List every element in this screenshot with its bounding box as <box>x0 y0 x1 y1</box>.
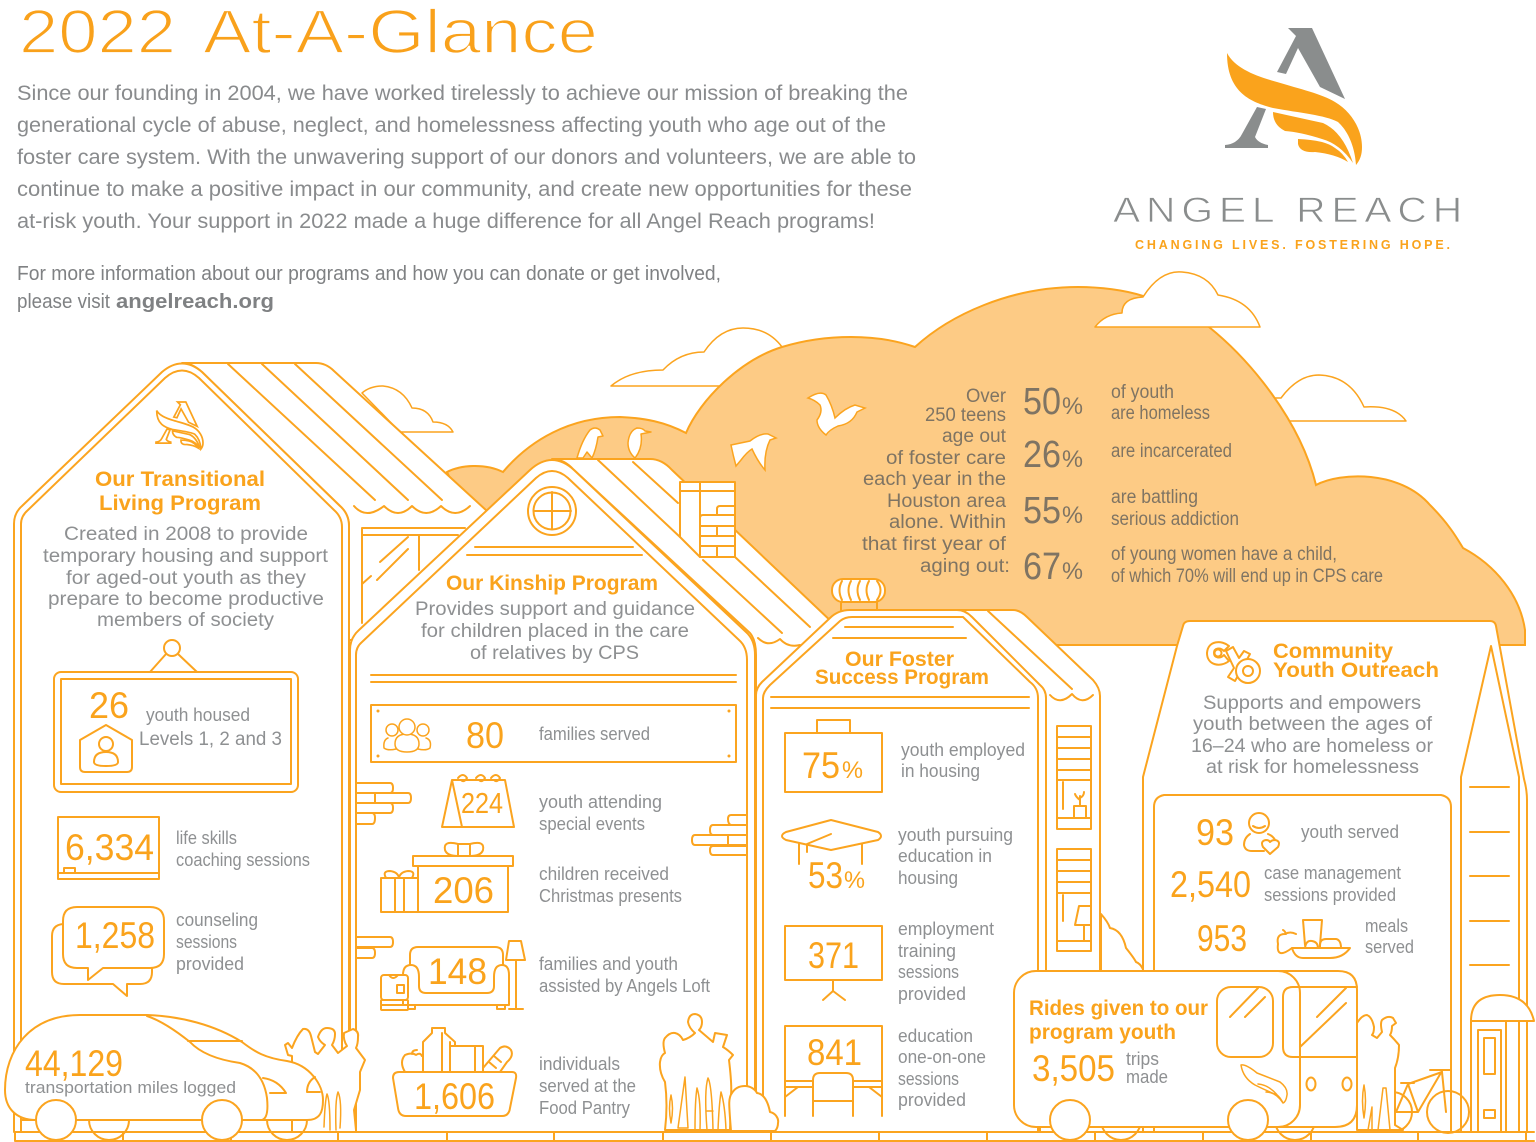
stat: Angels Loft: assisted by Angels Loft <box>539 976 710 996</box>
icon: bus wing <box>1241 1065 1287 1103</box>
stat: 26 percent <box>1023 434 1232 476</box>
description: Outreach <box>1191 693 1434 778</box>
panel: Kinship Program house <box>350 428 835 1132</box>
stat: youth employed: in housing <box>901 761 980 781</box>
bird on roof left <box>577 428 603 458</box>
house 4 walls <box>1143 621 1527 1132</box>
icon: desk calendar <box>442 775 514 827</box>
icon: gift boxes <box>381 843 513 912</box>
aging out text: age out <box>942 426 1007 447</box>
stat: 50 percent: are homeless <box>1111 403 1210 424</box>
description: Transitional Living: prepare to become productive <box>48 589 324 610</box>
sign: youth housed: 26 <box>89 685 129 726</box>
foster front walls <box>756 610 1046 1132</box>
stat: youth pursuing education <box>782 820 1013 896</box>
stat: counseling sessions <box>52 907 258 996</box>
heading: Our Foster Success Program <box>815 648 989 689</box>
stat: miles logged: transportation miles logged <box>25 1078 236 1097</box>
bird: flying dove large <box>808 393 865 435</box>
silhouette: family <box>660 1014 733 1130</box>
heading: Our Transitional Living Program: Living Program <box>99 492 261 515</box>
panel: Transitional Living Program house <box>14 364 349 1132</box>
sign: youth housed <box>54 640 298 792</box>
stat: 26 percent: are incarcerated <box>1111 441 1232 462</box>
stat: education sessions: education <box>898 1026 973 1046</box>
roof lines <box>598 460 810 633</box>
stat: trips made: 3,505 <box>1032 1048 1115 1089</box>
sign: youth housed: Levels 1, 2 and 3 <box>139 729 282 750</box>
car body <box>5 1015 323 1120</box>
icon: bicycle <box>1372 1070 1469 1133</box>
stat: Food Pantry: served at the <box>539 1076 636 1096</box>
heading: rides given <box>1029 997 1208 1044</box>
stat: 26 percent: % <box>1062 446 1083 473</box>
car door line <box>147 1016 320 1120</box>
stat: case management <box>1170 863 1401 905</box>
cloud: right <box>1270 375 1406 421</box>
stat: youth served: 93 <box>1196 812 1234 853</box>
stat: youth employed <box>785 720 1025 792</box>
icon: grocery basket <box>393 1028 516 1116</box>
stat: Food Pantry: individuals <box>539 1054 620 1074</box>
aging out text: Over <box>966 386 1007 407</box>
icon: briefcase <box>785 720 882 792</box>
stat: 67 percent: of which 70% will end up in CPS care <box>1111 566 1383 587</box>
bird: flying dove small <box>731 434 776 470</box>
icon: sofa, lamp and clothes <box>381 941 525 1010</box>
description: Kinship: for children placed in the care <box>421 621 689 642</box>
car front wheels <box>36 1100 242 1140</box>
bus side window <box>1217 987 1273 1057</box>
stat: youth pursuing education: % <box>844 867 865 894</box>
stat: employment training: sessions <box>898 962 959 982</box>
stat: meals served: meals <box>1365 916 1408 936</box>
plaque: families served: 80 <box>466 715 504 756</box>
stat: education sessions: sessions <box>898 1069 959 1089</box>
bus body <box>1014 971 1300 1127</box>
description: Outreach: 16–24 who are homeless or <box>1191 736 1434 757</box>
roof trim <box>833 627 966 638</box>
description: Outreach: youth between the ages of <box>1193 714 1433 735</box>
icon: angel reach outline mark <box>156 402 203 449</box>
bus front section <box>1280 971 1357 1127</box>
stat: youth pursuing education: education in <box>898 846 992 866</box>
stat: Christmas presents <box>381 843 682 912</box>
stat: meals served: 953 <box>1197 918 1247 959</box>
bus: rides given <box>1014 971 1357 1140</box>
description: Kinship: Provides support and guidance <box>415 599 695 620</box>
stat: special events: youth attending <box>539 792 662 812</box>
heading: Community Youth Outreach: Youth Outreach <box>1273 659 1439 682</box>
description: Transitional Living <box>43 524 329 631</box>
heading: Our Transitional Living Program <box>95 468 265 515</box>
stat: miles logged <box>25 1043 236 1097</box>
heading: Our Transitional Living Program: Our Transitional <box>95 468 265 491</box>
bricks: left upper <box>357 783 411 824</box>
foster side roof and wall <box>900 610 1100 975</box>
stat: counseling sessions: 1,258 <box>75 915 155 956</box>
heading: Our Kinship Program: Our Kinship Program <box>446 572 658 595</box>
title: 2022 <box>19 0 176 67</box>
intro paragraph <box>17 82 916 233</box>
shrub by foster house <box>729 1086 778 1131</box>
intro paragraph: Since our founding in 2004, we have worked tirelessly to achieve our mission of breaking the <box>17 82 908 105</box>
stat: 67 percent: of young women have a child, <box>1111 544 1337 565</box>
house 1 roof and side wall <box>182 363 487 640</box>
car rear wheels <box>89 1120 307 1140</box>
icon: graduation cap <box>782 820 881 864</box>
stat: 26 percent: 26 <box>1023 434 1061 476</box>
description: Transitional Living: for aged-out youth as they <box>66 568 307 589</box>
stat: special events: special events <box>539 814 645 834</box>
stat: education sessions: 841 <box>807 1032 862 1073</box>
stat: youth served <box>1196 812 1399 854</box>
description: Outreach: at risk for homelessness <box>1206 757 1419 778</box>
silhouette: people by car <box>285 1028 365 1132</box>
inner panel <box>1154 795 1451 1132</box>
trim lines <box>771 697 1029 708</box>
aging out text: aging out: <box>920 556 1010 577</box>
stat: life skills coaching: life skills <box>176 828 237 848</box>
cloud: top <box>1095 272 1260 327</box>
heading: Community Youth Outreach <box>1273 640 1439 682</box>
stat: youth employed: % <box>842 757 863 784</box>
stat: employment training: training <box>898 941 956 961</box>
stat: counseling sessions: provided <box>176 954 244 974</box>
stat: meals served: served <box>1365 937 1414 957</box>
stat: special events: 224 <box>461 788 503 820</box>
aging out text: Houston area <box>887 491 1006 512</box>
roof trim lines <box>467 547 642 555</box>
description: Transitional Living: temporary housing and support <box>43 546 329 567</box>
description: Kinship: of relatives by CPS <box>470 643 639 664</box>
stat: life skills coaching <box>58 817 310 879</box>
stats block: youth aging out <box>862 381 1383 588</box>
stat: miles logged: 44,129 <box>25 1043 123 1084</box>
stat: 67 percent: 67 <box>1023 546 1061 588</box>
heading: rides given: Rides given to our <box>1029 997 1208 1020</box>
shrub behind <box>1101 914 1145 975</box>
more information text: angelreach.org <box>116 291 274 313</box>
windows: side of house <box>1057 726 1091 951</box>
stat: employment training <box>785 919 994 1004</box>
bus wheels <box>1050 1100 1268 1140</box>
description: Transitional Living: members of society <box>97 610 275 631</box>
silhouette: person at bus <box>1357 1015 1403 1130</box>
stat: 55 percent <box>1023 487 1239 532</box>
aging out text: alone. Within <box>889 512 1006 533</box>
logo tagline: CHANGING LIVES. FOSTERING HOPE. <box>1135 238 1450 252</box>
stat: youth pursuing education: housing <box>898 868 958 888</box>
stat: youth served: youth served <box>1301 822 1399 842</box>
description: Transitional Living: Created in 2008 to provide <box>64 524 308 545</box>
stat: special events <box>442 775 662 834</box>
stat: youth pursuing education: 53 <box>808 855 843 896</box>
stat: case management: sessions provided <box>1264 885 1396 905</box>
icon: chalkboard <box>58 817 159 879</box>
stat: case management: 2,540 <box>1170 864 1251 905</box>
aging out text <box>862 386 1010 577</box>
heading: Our Foster Success Program: Success Program <box>815 666 989 689</box>
chimney <box>680 482 735 557</box>
house 2 walls <box>350 460 755 1132</box>
logo mark <box>1225 28 1362 165</box>
bird on roof right <box>628 428 651 458</box>
bricks: right <box>692 815 747 855</box>
icon: group of people <box>384 719 430 752</box>
stat: Christmas presents: 206 <box>433 870 494 911</box>
background cloud <box>447 287 1525 645</box>
heading: rides given: program youth <box>1029 1021 1176 1044</box>
aging out text: 250 teens <box>925 405 1006 426</box>
stat: youth employed: youth employed <box>901 740 1025 760</box>
stat: 67 percent: % <box>1062 558 1083 585</box>
aging out text: of foster care <box>886 448 1006 469</box>
stat: employment training: 371 <box>808 935 859 976</box>
cloud: left <box>611 328 782 386</box>
stat: youth employed: 75 <box>802 745 840 786</box>
icon: meal plate <box>1278 920 1350 958</box>
stat: employment training: provided <box>898 984 966 1004</box>
stat: 55 percent: 55 <box>1023 490 1061 532</box>
title <box>19 0 598 67</box>
stat: trips made <box>1032 1048 1168 1089</box>
sign: youth housed: youth housed <box>146 705 250 725</box>
plaque: families served: families served <box>539 724 650 744</box>
stat: counseling sessions: sessions <box>176 932 237 952</box>
stat: 50 percent: 50 <box>1023 381 1061 423</box>
stat: counseling sessions: counseling <box>176 910 258 930</box>
stat: 50 percent: of youth <box>1111 382 1174 403</box>
stat: 55 percent: % <box>1062 502 1083 529</box>
stat: Angels Loft: families and youth <box>539 954 678 974</box>
icon: presentation board <box>785 926 882 1000</box>
title: At-A-Glance <box>203 0 598 67</box>
stat: 50 percent <box>1023 381 1210 424</box>
house 2 roof <box>552 459 835 700</box>
icon: person in house <box>80 725 132 772</box>
intro paragraph: foster care system. With the unwavering support of our donors and volunteers, we are able to <box>17 146 916 169</box>
stat: employment training: employment <box>898 919 994 939</box>
roof vent <box>832 579 885 610</box>
stat: Angels Loft <box>381 941 710 1010</box>
stat: Food Pantry: 1,606 <box>414 1076 495 1117</box>
intro paragraph: generational cycle of abuse, neglect, and homelessness affecting youth who age out of the <box>17 114 886 137</box>
car: transportation miles <box>5 1015 323 1140</box>
stat: Christmas presents: Christmas presents <box>539 886 682 906</box>
stat: education sessions <box>785 1026 986 1116</box>
icon: person with heart <box>1244 813 1279 854</box>
aging out text: that first year of <box>862 534 1007 555</box>
stat: 55 percent: serious addiction <box>1111 509 1239 530</box>
stat: meals served <box>1197 916 1414 959</box>
icon: CYO logo <box>1207 642 1260 683</box>
aging out text: each year in the <box>863 469 1006 490</box>
stat: case management: case management <box>1264 863 1401 883</box>
icon: house door and awning <box>1471 995 1534 1132</box>
cloud: far left <box>362 386 453 432</box>
intro paragraph: at-risk youth. Your support in 2022 made a huge difference for all Angel Reach programs! <box>17 210 875 233</box>
stat: Food Pantry <box>393 1028 636 1118</box>
description: Kinship <box>415 599 695 664</box>
stat: life skills coaching: coaching sessions <box>176 850 310 870</box>
logo: Angel Reach <box>1113 28 1468 252</box>
stat: Food Pantry: Food Pantry <box>539 1098 630 1118</box>
stat: 50 percent: % <box>1062 393 1083 420</box>
trim lines <box>371 675 736 682</box>
stat: youth pursuing education: youth pursuing <box>898 825 1013 845</box>
plaque: families served <box>371 705 736 762</box>
icon: speech bubbles <box>52 907 164 996</box>
stat: Angels Loft: 148 <box>428 951 487 992</box>
more information text <box>17 263 721 313</box>
stat: education sessions: one-on-one <box>898 1047 986 1067</box>
description: Outreach: Supports and empowers <box>1203 693 1421 714</box>
stat: trips made: made <box>1126 1067 1168 1087</box>
house 1 walls <box>14 364 349 1132</box>
icon: desk and chair <box>785 1026 882 1116</box>
stat: education sessions: provided <box>898 1090 966 1110</box>
stat: Christmas presents: children received <box>539 864 669 884</box>
heading: Our Foster Success Program: Our Foster <box>845 648 954 671</box>
bricks: left lower <box>357 937 393 958</box>
stat: 67 percent <box>1023 544 1383 588</box>
more information text: please visit <box>17 291 110 313</box>
panel: Foster Success Program house <box>756 579 1100 1132</box>
stat: trips made: trips <box>1126 1049 1159 1069</box>
bus windshield <box>1283 987 1357 1090</box>
stat: 55 percent: are battling <box>1111 487 1198 508</box>
panel: Community Youth Outreach house <box>1101 621 1534 1133</box>
round attic window <box>528 487 576 535</box>
logo wordmark: ANGEL REACH <box>1113 191 1468 230</box>
intro paragraph: continue to make a positive impact in our community, and create new opportunities for these <box>17 178 912 201</box>
stat: life skills coaching: 6,334 <box>65 827 154 868</box>
more information text: For more information about our programs and how you can donate or get involved, <box>17 263 721 285</box>
bus rear wheels <box>1101 1100 1315 1140</box>
heading: Community Youth Outreach: Community <box>1273 640 1393 663</box>
ground lines <box>15 1132 1534 1141</box>
scallop <box>758 638 800 646</box>
